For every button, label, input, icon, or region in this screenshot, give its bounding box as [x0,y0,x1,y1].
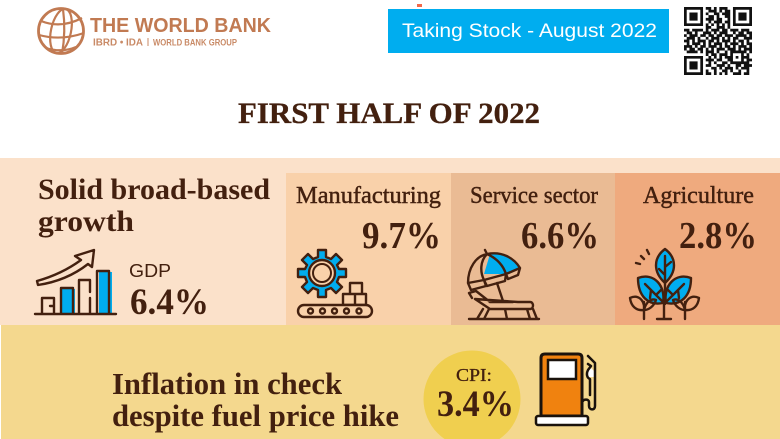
icon: beach umbrella and lounger [468,250,539,319]
icon: fuel pump [536,354,595,425]
date banner [388,9,669,53]
icon: globe [38,7,84,55]
icon: rising bar chart [35,250,116,314]
title: FIRST HALF OF 2022 [238,97,540,130]
label: Agriculture [643,183,754,209]
GDP label: GDP [129,261,171,281]
value: 6.6% [521,215,599,257]
heading: growth: growth [38,205,134,238]
label: Manufacturing [296,183,441,209]
date banner: Taking Stock - August 2022 [402,20,657,42]
panel: service sector [451,173,615,325]
icon: plant [630,249,699,319]
panel: agriculture [615,173,780,325]
panel: manufacturing [286,173,451,325]
panel: solid broad-based growth [0,158,780,325]
CPI badge [424,350,520,439]
icon: gear and conveyor [298,250,372,317]
panel: inflation [1,325,780,439]
logo subline: IBRD • IDA [93,36,143,48]
heading: inflation: despite fuel price hike [112,398,399,433]
CPI value: 3.4% [437,384,514,425]
logo wordmark: THE WORLD BANK [90,15,272,37]
heading: inflation: Inflation in check [112,366,343,401]
World Bank logo: WORLD BANK GROUP [153,38,237,48]
value: 9.7% [362,215,441,257]
value: 2.8% [679,215,757,257]
small orange mark [417,4,422,7]
label: Service sector [470,183,598,209]
GDP value: 6.4% [130,282,209,323]
QR code [684,8,752,74]
heading: growth: Solid broad-based [38,173,270,206]
CPI label: CPI: [456,365,492,385]
World Bank logo [38,7,272,55]
